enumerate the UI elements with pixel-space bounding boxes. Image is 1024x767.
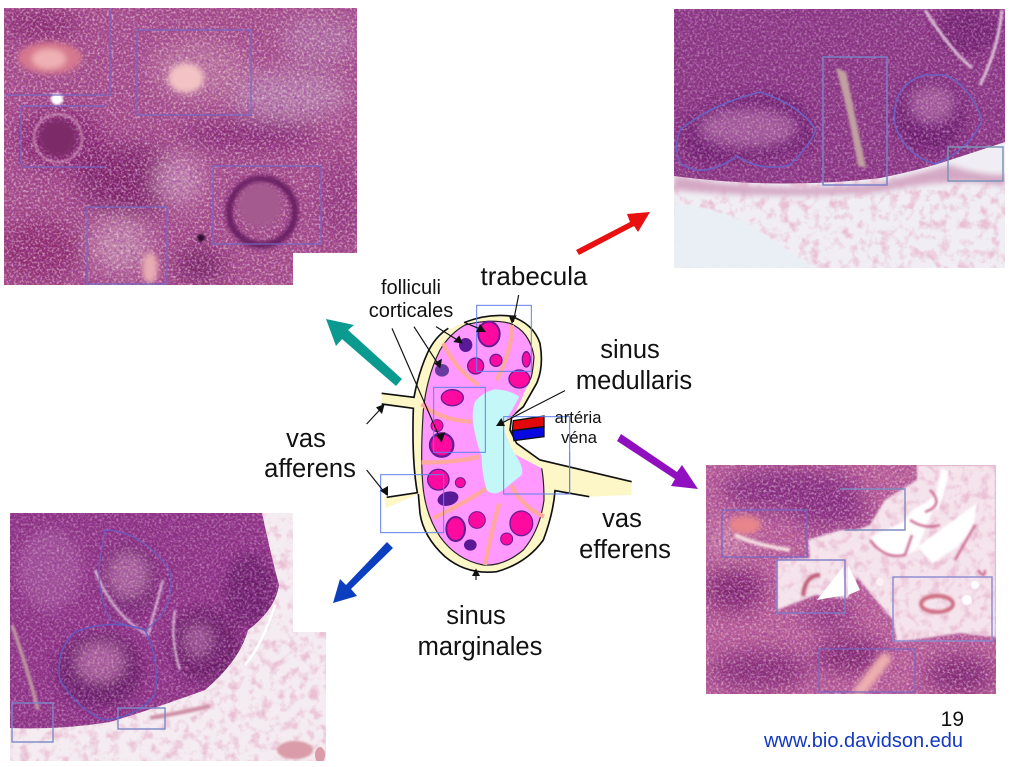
micrograph: top right, cortex with trabecula	[674, 4, 1005, 268]
blue selection boxes	[381, 305, 570, 533]
label: sinus marginales: marginales	[418, 633, 542, 661]
micrograph: top left, medulla	[0, 8, 360, 285]
label: vas afferens: afferens	[264, 455, 356, 483]
label: folliculi corticales: folliculi	[381, 277, 441, 299]
label: sinus medullaris: sinus	[600, 336, 660, 364]
cortex outline	[422, 321, 544, 565]
page number: 19	[941, 708, 964, 731]
label: sinus medullaris: medullaris	[576, 367, 692, 395]
arrow: blue to bottom left	[333, 542, 393, 603]
trabeculae	[422, 325, 544, 565]
label: artéria véna: artéria	[555, 409, 601, 427]
label: trabecula: trabecula	[481, 261, 588, 291]
arrow: teal to top left	[326, 319, 402, 386]
pointer arrows	[367, 295, 565, 580]
source link: www.bio.davidson.edu	[763, 730, 963, 752]
micrograph: bottom left, subcapsular follicles	[10, 513, 326, 763]
lymph node diagram	[367, 295, 632, 580]
cortex	[422, 321, 544, 565]
artery and vein	[512, 416, 544, 431]
label: artéria véna: véna	[561, 429, 598, 447]
label: vas efferens: efferens	[579, 536, 671, 564]
arrow: red to top right	[576, 212, 650, 255]
label: sinus marginales: sinus	[446, 602, 506, 630]
arrow: purple to bottom right	[617, 434, 698, 489]
follicles	[428, 322, 533, 545]
label: folliculi corticales: corticales	[369, 300, 453, 322]
micrograph: bottom right, hilum vessels	[705, 465, 996, 695]
sinus medullaris	[473, 389, 522, 493]
label: vas efferens: vas	[602, 505, 642, 533]
capsule and vessels	[382, 315, 632, 572]
label: vas afferens: vas	[286, 425, 326, 453]
